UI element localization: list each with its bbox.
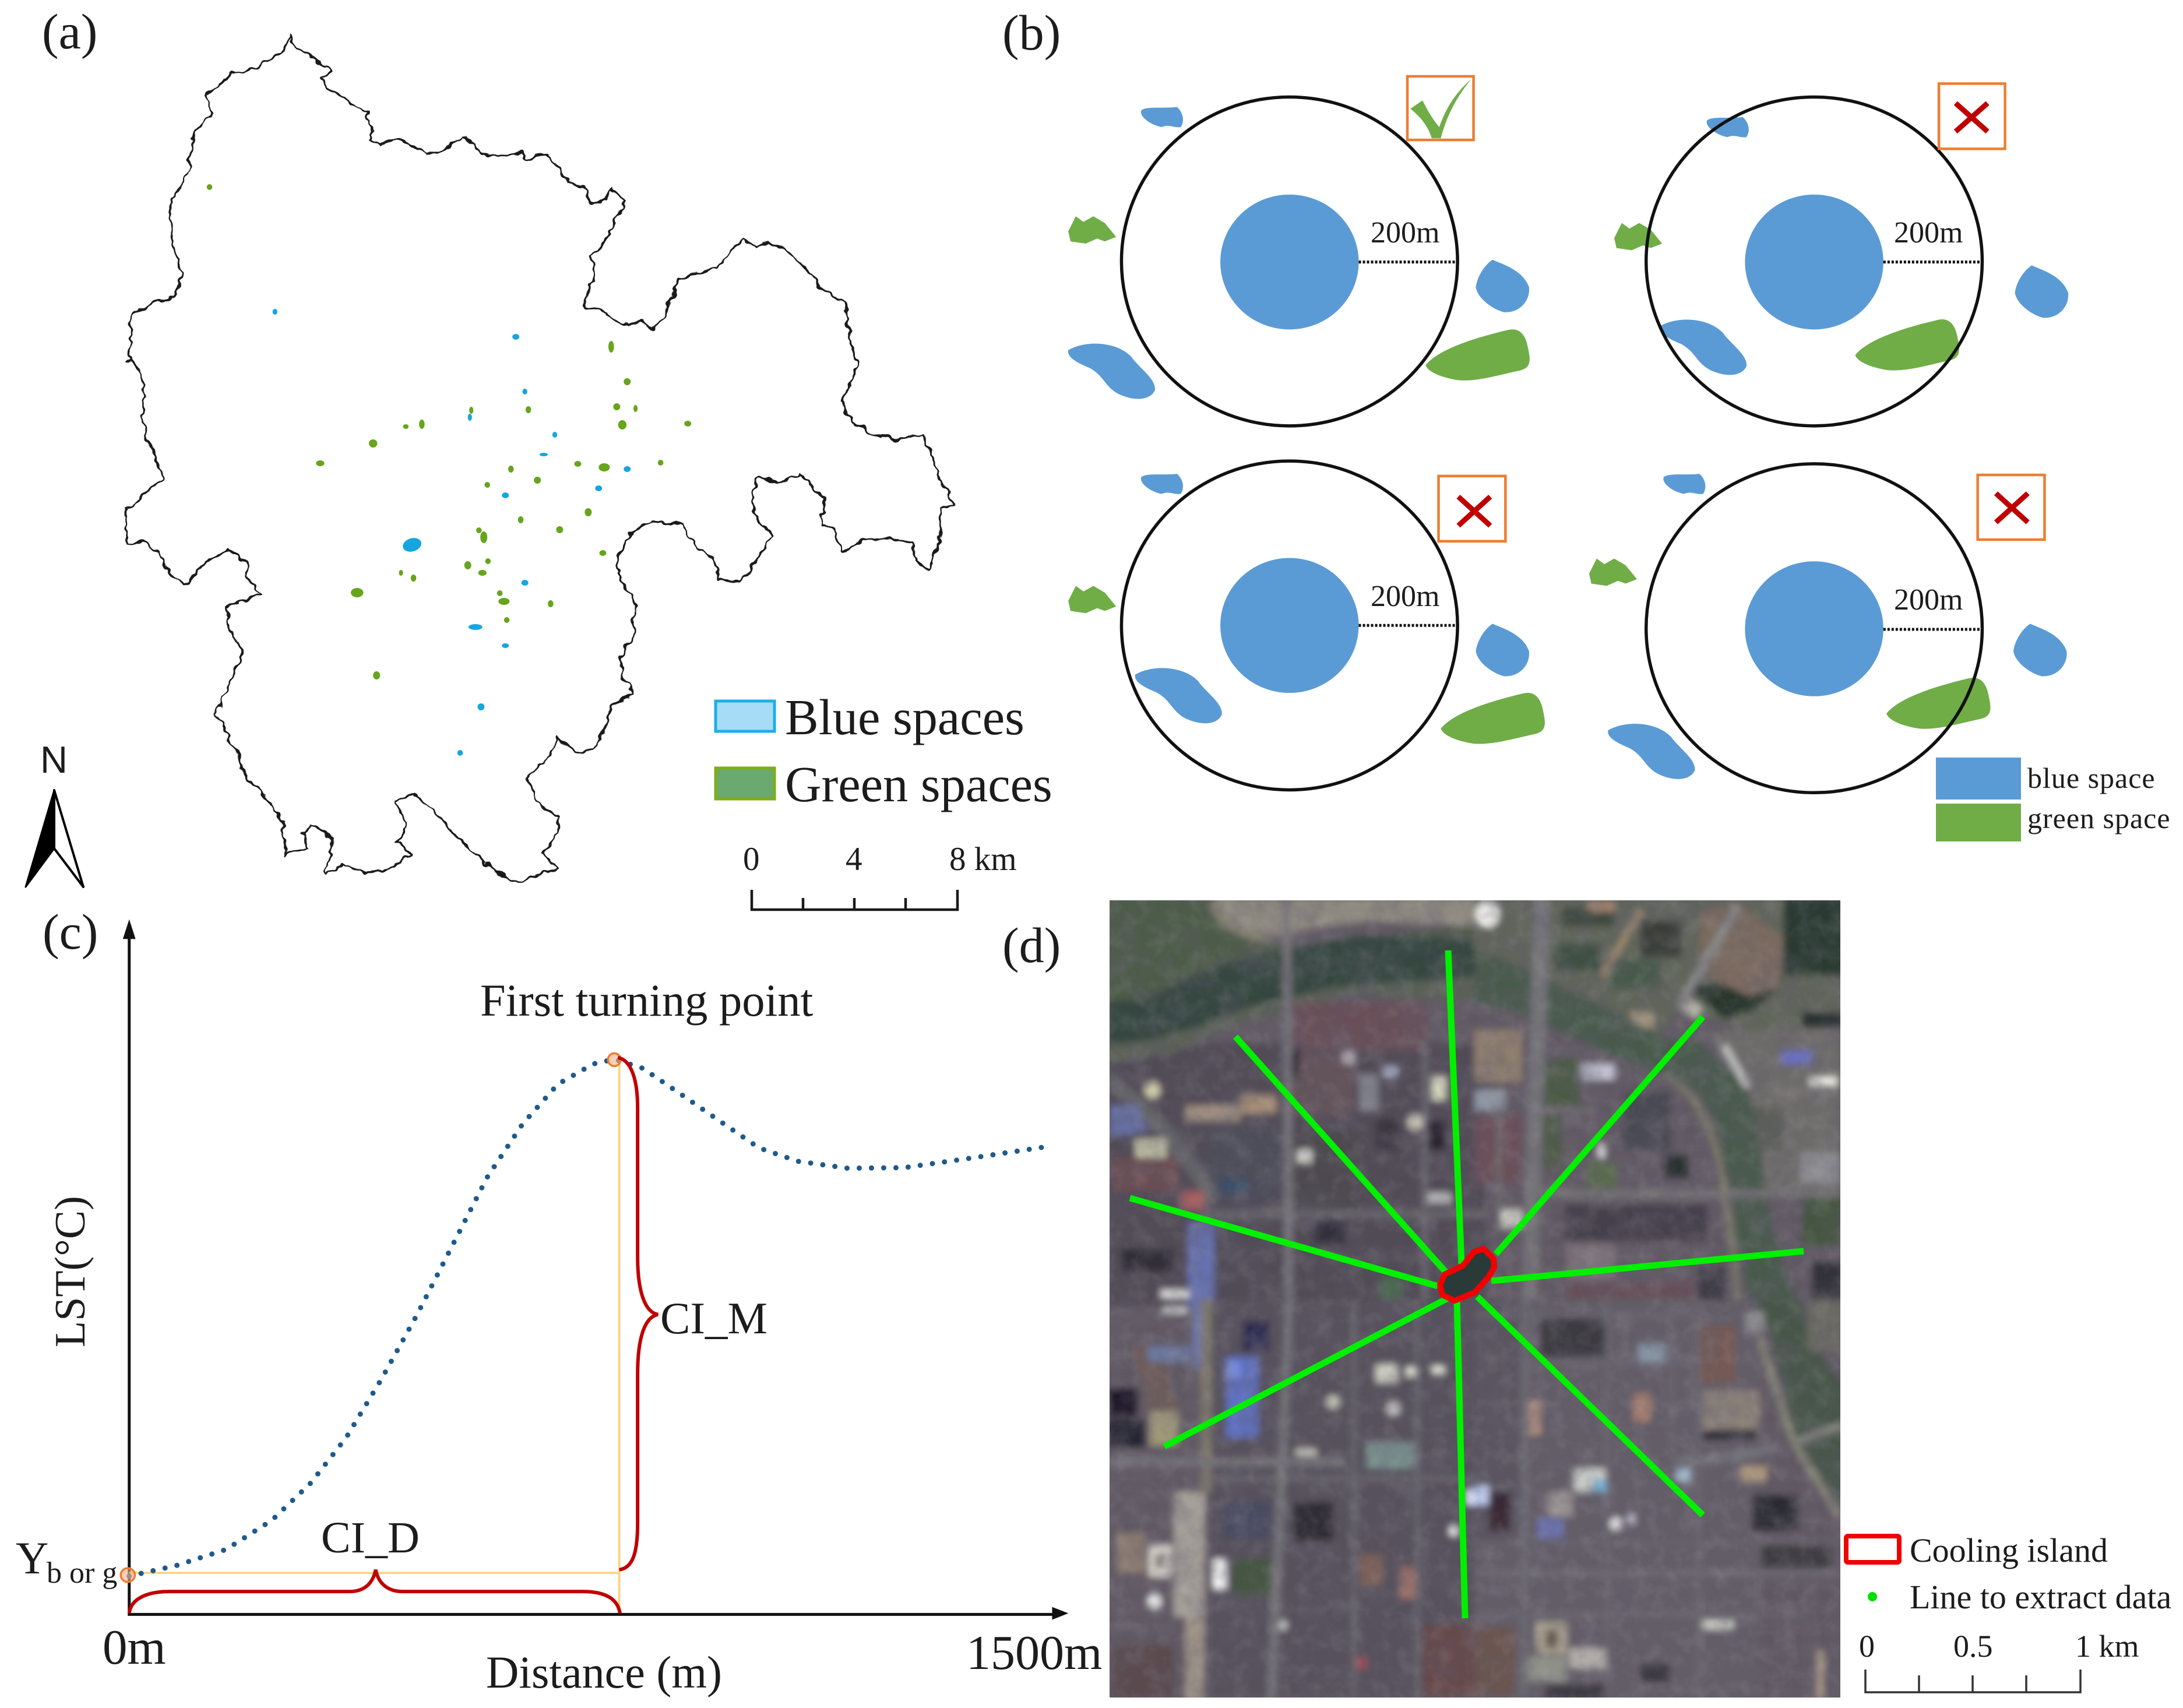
x-axis label: 1500m: 1500m [966,1626,1102,1680]
diagram 1: valid case [1068,97,1530,426]
legend: green space: green space [2027,802,2171,834]
scale bar 0-1 km: 0 [1859,1629,1875,1664]
diagram 2 label: 200m: 200m [1894,216,1963,249]
panel label (c): (c) [43,904,98,960]
panel label (a): (a) [42,3,97,59]
panel (b): buffer diagrams [1068,76,2171,841]
scale bar 0-8 km: 8 km [949,841,1017,878]
blue space patches [273,309,631,756]
scale bar 0-1 km: 1 km [2075,1629,2139,1664]
legend: blue space: blue space [2027,762,2156,794]
satellite image [1101,892,1853,1707]
chart label: Y b or g [16,1533,117,1590]
scale bar 0-8 km [743,841,1017,910]
diagram 3 label: 200m: 200m [1371,580,1439,613]
scale bar 0-8 km: 0 [743,841,760,878]
CI_D brace [129,1570,620,1614]
scale bar 0-1 km [1859,1629,2139,1692]
diagram 1 label: 200m: 200m [1371,216,1439,249]
CI_M brace [618,1058,658,1570]
north arrow: N [40,738,68,781]
diagram 1 check mark box [1407,76,1474,140]
x-axis title: Distance (m) [486,1647,722,1698]
chart label: first turning point: First turning point [480,975,814,1026]
axes [123,920,1068,1619]
chart label: Y b or g: b or g [47,1556,117,1590]
yellow guide lines [129,1060,619,1614]
legend: blue space [1936,758,2156,800]
y-axis title: LST(°C) [47,1196,94,1347]
diagram 3 cross box [1439,476,1505,541]
chart label: Y b or g: Y [16,1533,48,1583]
chart label: CI_M: CI_M [660,1293,767,1343]
diagram 4 cross box [1978,475,2044,540]
turning point markers [121,1054,621,1582]
LST dotted curve [129,1059,1041,1576]
scale bar 0-1 km: 0.5 [1953,1629,1993,1664]
diagram 2 cross box [1939,83,2005,149]
scale bar 0-8 km: 4 [846,841,862,878]
panel label (b): (b) [1002,5,1061,61]
diagram 3: invalid case [1068,461,1545,790]
green extraction lines [1130,950,1804,1618]
chart label: CI_D: CI_D [321,1513,420,1562]
green space patches [207,184,691,679]
diagram 4: invalid case [1589,464,2067,793]
panel (a): study area map [26,36,1052,910]
legend: green space [1936,802,2171,841]
panel label (d): (d) [1002,917,1061,973]
legend: green spaces: Green spaces [785,756,1052,812]
panel (d): satellite image with extraction lines [1101,892,2171,1707]
legend: cooling island: Cooling island [1910,1531,2108,1569]
legend: blue spaces: Blue spaces [785,689,1024,745]
map outline [125,36,955,883]
x-axis label: 0m: 0m [103,1620,166,1675]
diagram 4 label: 200m: 200m [1894,583,1963,617]
panel (c): LST distance chart [16,920,1102,1698]
north arrow [26,738,83,887]
legend: line to extract data: Line to extract data [1910,1578,2171,1616]
cooling island outline [1440,1249,1494,1301]
diagram 2: invalid case [1614,97,2068,426]
